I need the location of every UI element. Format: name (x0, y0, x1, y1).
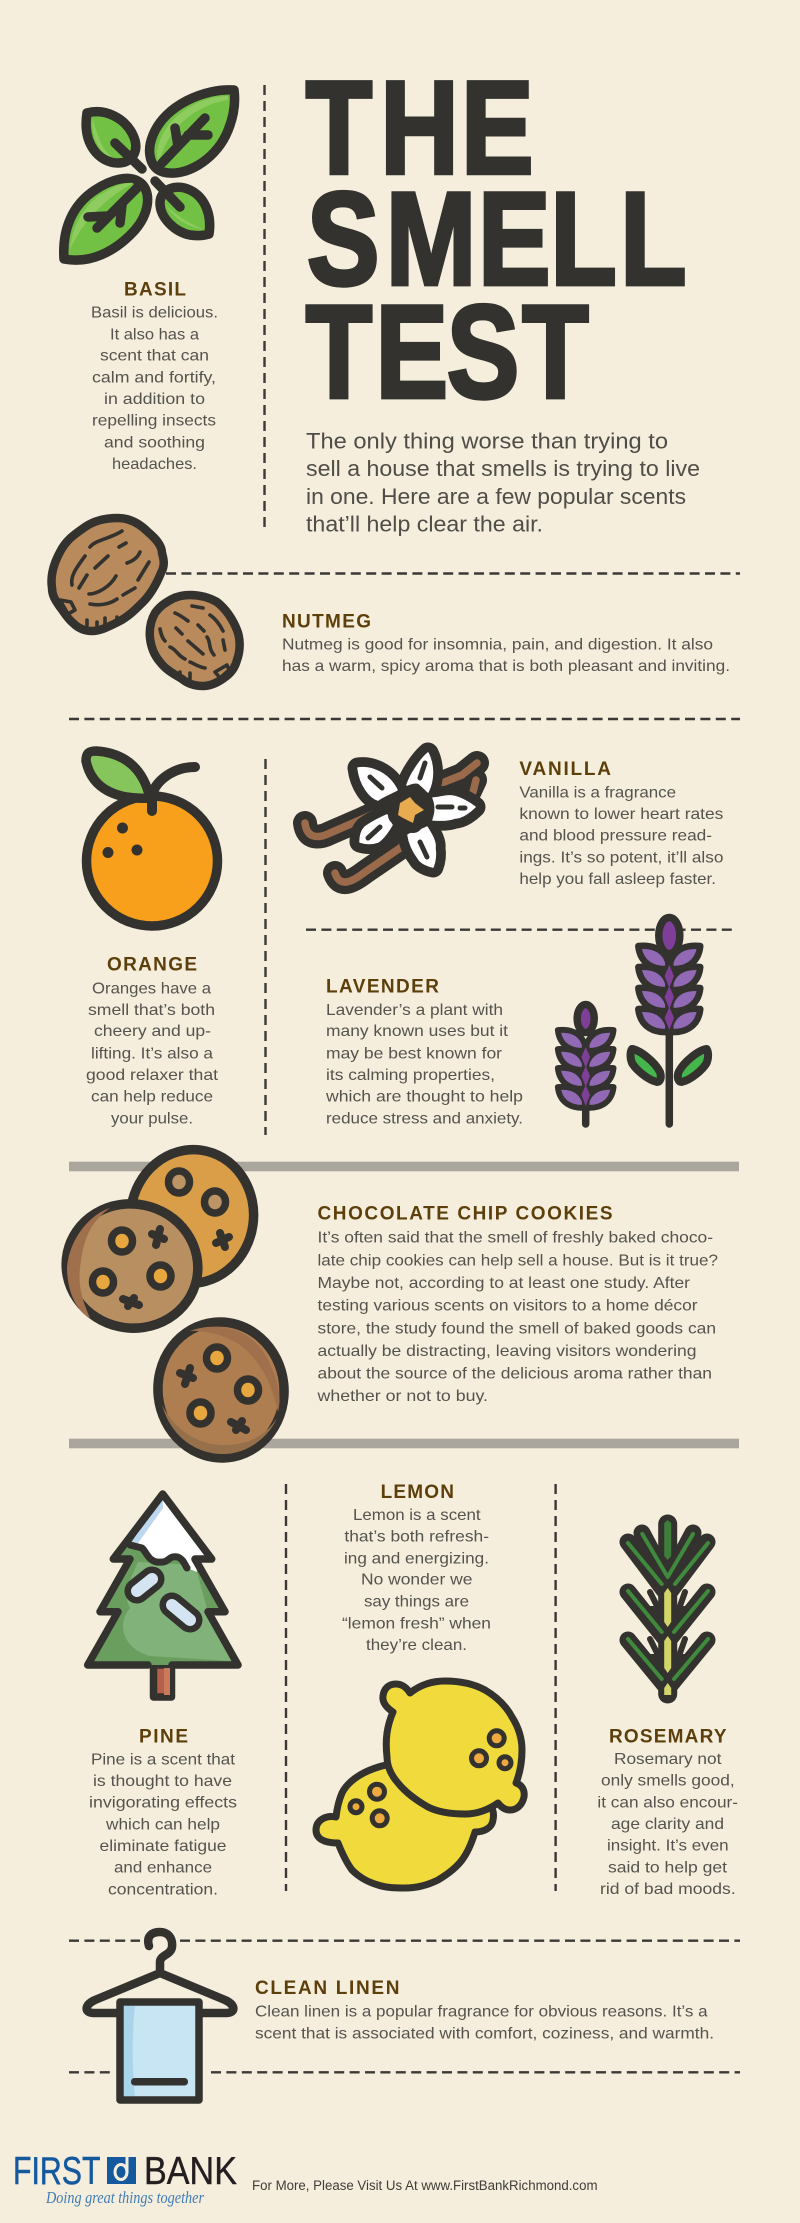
text: rosemary: Rosemary not (614, 1751, 722, 1768)
icon: cookies (55, 1142, 291, 1464)
text: basil: repelling insects (92, 413, 216, 430)
text: vanilla: and blood pressure read- (519, 828, 712, 845)
text: pine: is thought to have (93, 1773, 232, 1790)
icon: vanilla flower and pods (305, 753, 477, 882)
text: lavender: Lavender’s a plant with (326, 1002, 503, 1019)
text: vanilla (519, 784, 724, 888)
text: basil: and soothing (104, 435, 205, 452)
text: pine: invigorating effects (89, 1795, 237, 1812)
text: pine (89, 1751, 237, 1898)
intro text: The only thing worse than trying to (306, 428, 668, 454)
icon: lavender sprigs (558, 918, 708, 1124)
heading: lavender: LAVENDER (326, 977, 439, 998)
panel: rosemary (597, 1520, 738, 1898)
text: basil: It also has a (110, 327, 199, 344)
text: rosemary (597, 1751, 738, 1898)
panel: nutmeg (51, 518, 730, 686)
text: clean linen: Clean linen is a popular fragrance for obvious reasons. It’s a (255, 2004, 708, 2021)
panel: basil (64, 90, 235, 473)
text: lavender: its calming properties, (326, 1067, 495, 1084)
text: nutmeg: Nutmeg is good for insomnia, pain, and digestion. It also (282, 636, 713, 653)
text: orange: can help reduce (91, 1089, 213, 1106)
text: lavender: reduce stress and anxiety. (326, 1110, 523, 1127)
text: rosemary: rid of bad moods. (600, 1881, 736, 1898)
text: pine: eliminate fatigue (100, 1838, 227, 1855)
heading: rosemary: ROSEMARY (609, 1727, 727, 1748)
text: cookies (316, 1230, 718, 1405)
text: orange (86, 980, 219, 1127)
text: lemon: Lemon is a scent (353, 1507, 481, 1524)
logo: First Bank (13, 2150, 237, 2207)
text: lemon (342, 1507, 491, 1654)
intro text: sell a house that smells is trying to live (306, 456, 700, 481)
title: TEST (306, 277, 589, 426)
text: orange: good relaxer that (86, 1067, 219, 1084)
icon: rosemary sprig (628, 1520, 708, 1695)
logo: First Bank: FIRST (13, 2150, 100, 2193)
text: rosemary: only smells good, (601, 1773, 735, 1790)
title: SMELL (307, 164, 687, 313)
text: vanilla: ings. It’s so potent, it’ll also (519, 849, 724, 866)
heading: basil: BASIL (124, 279, 186, 300)
intro text (306, 428, 700, 536)
panel: lavender (325, 918, 708, 1127)
text: rosemary: insight. It’s even (607, 1838, 729, 1855)
panel: lemon (316, 1482, 524, 1888)
icon: hanger and towel (87, 1932, 233, 2100)
title (306, 53, 687, 426)
text: lavender: which are thought to help (325, 1089, 523, 1106)
text: lemon: ing and energizing. (344, 1550, 489, 1567)
text: basil: headaches. (112, 456, 197, 473)
text: orange: cheery and up- (94, 1023, 211, 1040)
text: basil: Basil is delicious. (91, 305, 218, 322)
icon: lemons (316, 1681, 524, 1888)
text: lavender: may be best known for (326, 1045, 503, 1062)
text: lemon: “lemon fresh” when (342, 1615, 491, 1632)
text: pine: and enhance (114, 1860, 212, 1877)
icon: orange (86, 751, 218, 926)
logo: First Bank: BANK (144, 2150, 237, 2193)
text: orange: Oranges have a (92, 980, 211, 997)
text: lemon: say things are (364, 1594, 469, 1611)
text: cookies: store, the study found the smell of baked goods can (318, 1320, 716, 1337)
text: lemon: No wonder we (361, 1572, 473, 1589)
text: rosemary: it can also encour- (597, 1794, 738, 1811)
text: nutmeg: has a warm, spicy aroma that is both pleasant and inviting. (282, 658, 730, 675)
icon: pine tree (88, 1494, 238, 1697)
text: rosemary: said to help get (608, 1859, 728, 1876)
text: lavender: many known uses but it (326, 1023, 509, 1040)
text: cookies: actually be distracting, leaving visitors wondering (318, 1343, 696, 1360)
icon: nutmeg (51, 518, 240, 686)
intro text: that’ll help clear the air. (306, 512, 543, 536)
text: clean linen (255, 2004, 714, 2042)
text: pine: Pine is a scent that (91, 1751, 236, 1768)
footer text: For More, Please Visit Us At www.FirstBankRichmond.com (252, 2178, 598, 2193)
text: vanilla: help you fall asleep faster. (519, 871, 716, 888)
heading: orange: ORANGE (107, 955, 197, 976)
heading: clean linen: CLEAN LINEN (255, 1978, 400, 1999)
text: cookies: testing various scents on visitors to a home décor (318, 1298, 698, 1315)
panel: chocolate chip cookies (55, 1142, 718, 1464)
text: lavender (325, 1002, 523, 1127)
title: THE (306, 53, 534, 202)
heading: vanilla: VANILLA (519, 759, 611, 780)
text: cookies: about the source of the delicious aroma rather than (318, 1366, 712, 1383)
text: orange: your pulse. (111, 1110, 193, 1127)
text: orange: lifting. It’s also a (91, 1045, 213, 1062)
text: vanilla: known to lower heart rates (519, 806, 723, 823)
panel: orange (86, 751, 219, 1127)
panel: vanilla (305, 753, 724, 888)
text: cookies: late chip cookies can help sell a house. But is it true? (318, 1252, 718, 1269)
text: orange: smell that’s both (88, 1002, 215, 1019)
text: rosemary: age clarity and (611, 1816, 724, 1833)
text: cookies: It’s often said that the smell of freshly baked choco- (318, 1230, 713, 1247)
text: basil: calm and fortify, (92, 369, 216, 386)
text: lemon: they’re clean. (366, 1637, 467, 1654)
text: basil (91, 305, 218, 473)
text: clean linen: scent that is associated with comfort, coziness, and warmth. (255, 2025, 714, 2042)
text: lemon: that’s both refresh- (344, 1529, 489, 1546)
icon: basil leaves (64, 90, 235, 260)
text: nutmeg (282, 636, 730, 675)
heading: nutmeg: NUTMEG (282, 612, 371, 632)
heading: pine: PINE (139, 1727, 188, 1748)
intro text: in one. Here are a few popular scents (306, 484, 686, 509)
text: cookies: whether or not to buy. (316, 1388, 488, 1405)
text: pine: concentration. (108, 1881, 218, 1898)
text: basil: in addition to (104, 391, 205, 408)
panel: clean linen (87, 1932, 714, 2100)
panel: pine (88, 1494, 238, 1898)
text: cookies: Maybe not, according to at least one study. After (318, 1275, 691, 1292)
text: vanilla: Vanilla is a fragrance (519, 784, 676, 801)
heading: cookies: CHOCOLATE CHIP COOKIES (318, 1204, 612, 1225)
heading: lemon: LEMON (381, 1482, 454, 1503)
logo: First Bank: Doing great things together (45, 2188, 204, 2207)
text: pine: which can help (105, 1816, 220, 1833)
text: basil: scent that can (100, 348, 209, 364)
